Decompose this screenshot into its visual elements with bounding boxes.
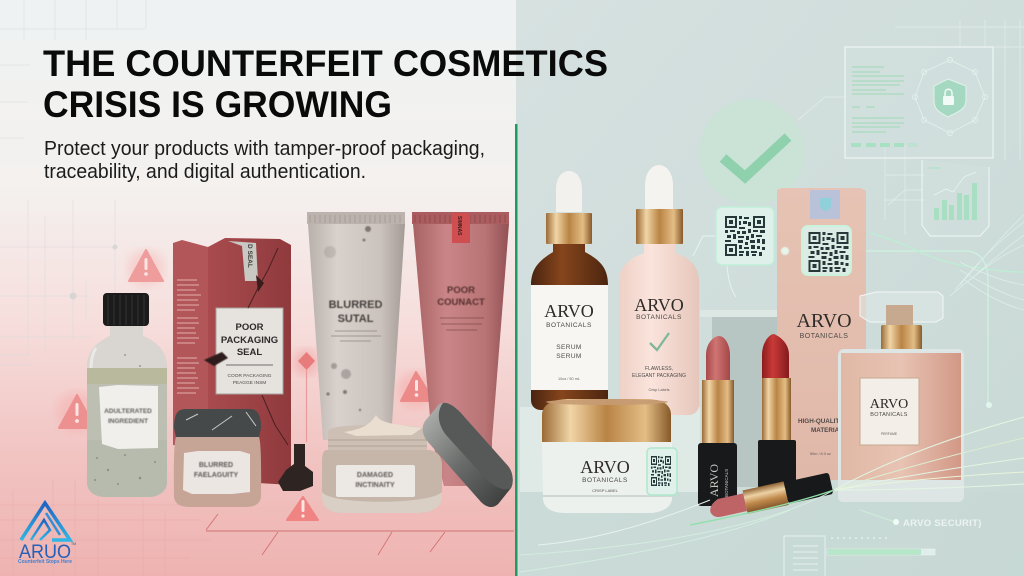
security panel [845,47,993,158]
box: poor packaging seal: PEAGGE INSM [233,380,266,386]
cream jar with QR: ARVO [580,457,630,477]
icon: green check [650,333,669,350]
cream jar with QR: BOTANICALS [582,477,628,484]
tube: blurred label: BLURRED [329,299,382,311]
security node [986,402,992,408]
left background [0,0,516,576]
bottle: contaminated ingredient: INGREDIENT [108,418,148,425]
jar: damaged integrity: DAMAGED [357,472,393,479]
ARVO box: ARVO [796,310,852,332]
warning icon: top [128,250,164,286]
amber serum bottle: SERUM [556,353,582,360]
subtitle: traceability, and digital authentication. [44,161,366,183]
amber serum bottle: BOTANICALS [546,322,592,329]
jar: damaged integrity: INCTINAITY [355,482,395,489]
tube: poor colinact: COUNACT [437,297,485,308]
logo mark [21,503,70,540]
lipstick: red [758,334,796,488]
cream jar with QR [542,399,677,513]
tube: blurred label: SUTAL [338,313,374,325]
jar: blurred label: FAELAGUITY [194,472,238,479]
amber serum bottle: 10oz / 50 mL [558,377,580,381]
box: poor packaging seal: POOR [236,322,264,333]
progress bar [827,549,935,555]
amber serum bottle [531,171,608,410]
pink flawless bottle: ARVO [634,295,684,315]
panel text lines [852,67,904,132]
pink flawless bottle: Crisp Labels [648,388,670,392]
bottle: contaminated ingredient: ADULTERATED [104,408,152,415]
tube: poor colinact: SIMNAS [456,216,462,236]
warning icon: left [57,392,97,432]
broken seal debris [278,444,313,491]
box: poor packaging seal: PACKAGING [221,335,278,346]
jar: damaged integrity [322,415,442,513]
lipstick: rose: BOTANICALS [724,469,729,497]
subtitle: Protect your products with tamper-proof packaging, [44,138,485,160]
ARVO box: 50m / 8.0 oz [810,452,831,456]
jar: blurred label [174,409,261,507]
tube: poor colinact [412,212,509,486]
tube: poor colinact: POOR [447,285,475,296]
platform: pedestal [520,310,1024,576]
lipstick: lying [707,471,834,522]
pink flawless bottle [619,165,699,415]
green data wave lines [785,215,1024,405]
perfume bottle: BOTANICALS [870,412,908,418]
title: CRISIS IS GROWING [43,83,392,125]
open jar lid [423,403,513,507]
logo wordmark: ARUO [19,542,71,563]
box: poor packaging seal: D SEAL [246,244,253,268]
box QR code [781,226,851,275]
amber serum bottle: SERUM [556,344,582,351]
perfume cap [860,292,943,322]
right background [516,0,1024,576]
warning marker: diamond [293,349,319,442]
box: poor packaging seal: COOR PACKAGING [228,373,272,379]
pink flawless bottle: FLAWLESS, [645,366,673,372]
ARVO box: HIGH-QUALITY [798,418,844,425]
cream jar with QR: CRISP LABEL [592,488,619,493]
box: poor packaging seal [173,238,291,485]
ARVO box: MATERIALS [811,427,847,434]
perfume glass [838,349,964,502]
ARVO box [777,188,866,480]
perfume bottle: PERFUME [881,432,898,436]
tube: blurred label [307,212,405,440]
box: poor packaging seal: SEAL [237,347,262,358]
divider [515,124,518,576]
warning icon: bottom [287,497,318,520]
bars [934,183,977,220]
perfume bottle [838,292,964,502]
logo tagline: Counterfeit Stops Here [18,559,72,565]
left QR callout [693,207,774,297]
bottle: contaminated ingredient [87,293,167,497]
pink flawless bottle: BOTANICALS [636,314,682,321]
warning icon: center right [398,372,434,408]
icon: shield with lock [912,58,988,136]
analytics chart panel [922,160,989,236]
label: ARVO security: ARVO SECURIT) [903,518,982,529]
title: THE COUNTERFEIT COSMETICS [43,42,608,84]
lipstick: rose: ARVO [707,464,721,497]
ARVO box: BOTANICALS [800,333,848,340]
green light beams [520,417,1024,572]
hologram sticker [810,190,840,219]
background tech lines: right [798,20,1024,235]
bottom document panel [784,536,825,576]
panel progress chips [851,143,918,147]
pink flawless bottle: ELEGANT PACKAGING [632,373,686,379]
logo TM: TM [71,542,76,546]
dot row [831,537,887,539]
lipstick: rose [698,336,737,506]
verified check badge [699,99,805,205]
jar: blurred label: BLURRED [199,462,233,469]
logo: ARUO [18,503,76,565]
perfume bottle: ARVO [870,397,908,412]
subtitle [44,138,485,183]
amber serum bottle: ARVO [544,301,594,321]
title [43,42,608,125]
perfume label [860,378,919,445]
